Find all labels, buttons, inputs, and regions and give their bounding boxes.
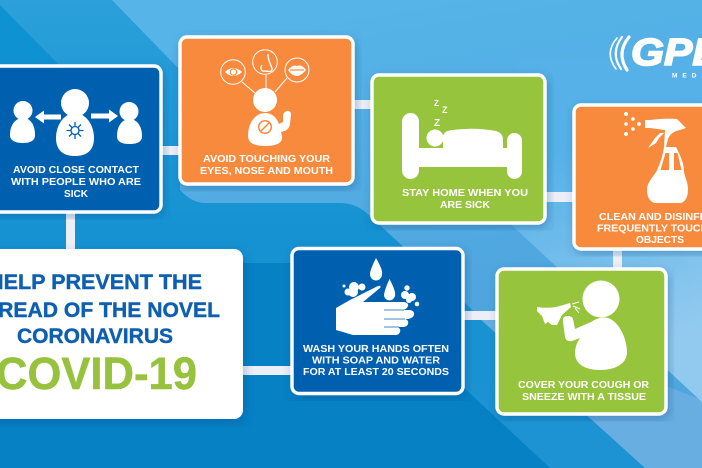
panel: stay home xyxy=(372,75,545,223)
title panel xyxy=(0,249,243,419)
icon: person in bed: Z xyxy=(434,118,440,129)
heading: CORONAVIRUS xyxy=(17,325,173,348)
caption: WITH SOAP AND WATER xyxy=(312,356,440,366)
caption xyxy=(303,344,450,378)
icon: person in bed: Z xyxy=(442,105,448,115)
icon: three people with arrows xyxy=(10,89,142,156)
panel: wash hands xyxy=(292,248,463,394)
caption: SNEEZE WITH A TISSUE xyxy=(522,392,647,403)
caption xyxy=(597,212,702,246)
caption: ARE SICK xyxy=(440,200,490,211)
panel: clean and disinfect xyxy=(574,105,702,249)
caption xyxy=(200,154,333,177)
caption: SICK xyxy=(64,189,88,200)
caption xyxy=(11,165,142,200)
connector lines xyxy=(66,100,622,375)
icon: virus xyxy=(66,122,84,139)
icon: person in bed: Z xyxy=(434,99,439,108)
caption: AVOID CLOSE CONTACT xyxy=(13,165,139,176)
icon: person in bed xyxy=(402,99,522,179)
panel: avoid close contact xyxy=(0,66,161,212)
caption: WASH YOUR HANDS OFTEN xyxy=(303,344,449,355)
icon: spray bottle xyxy=(624,112,688,203)
panel: avoid touching face xyxy=(180,37,353,184)
caption: EYES, NOSE AND MOUTH xyxy=(200,166,333,177)
caption: AVOID TOUCHING YOUR xyxy=(203,154,330,165)
COVID-19 label: COVID-19 xyxy=(0,348,197,399)
panel: cover cough xyxy=(497,269,666,414)
heading xyxy=(0,271,220,348)
caption: COVER YOUR COUGH OR xyxy=(518,380,649,391)
caption xyxy=(402,188,528,211)
icon: person coughing into tissue xyxy=(537,280,627,370)
icon: hands with water and soap xyxy=(336,258,419,335)
logo: GPB Media xyxy=(610,32,702,80)
caption: FOR AT LEAST 20 SECONDS xyxy=(303,367,450,378)
caption: OBJECTS xyxy=(636,235,685,246)
caption: WITH PEOPLE WHO ARE xyxy=(11,177,142,188)
caption: STAY HOME WHEN YOU xyxy=(402,188,528,199)
icon: person with eye, nose, mouth xyxy=(221,50,309,146)
caption xyxy=(518,380,649,403)
